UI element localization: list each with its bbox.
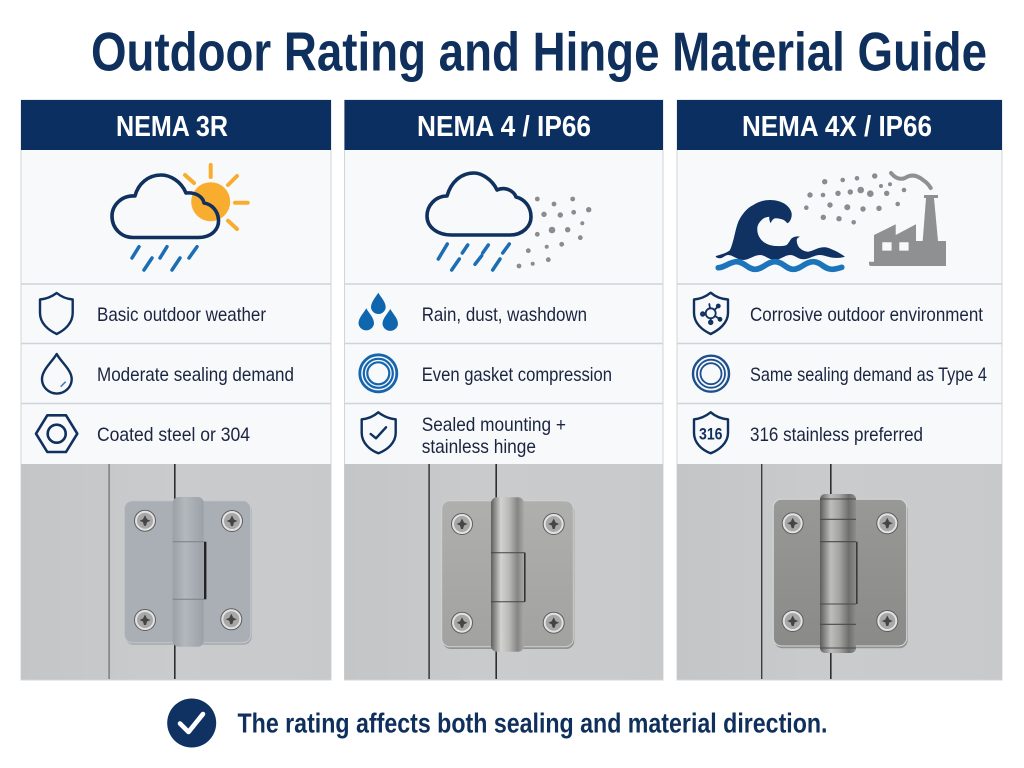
header: NEMA 3R: [21, 100, 331, 150]
icon: check badge: [167, 698, 216, 748]
row: sealed mounting + stainless hinge: [362, 412, 566, 458]
hinge photo: stainless: [344, 464, 663, 680]
row: sealed mounting + stainless hinge: stainless hinge: [422, 436, 536, 458]
icon: concentric gasket rings: [693, 356, 729, 392]
icon: three water drops: [358, 293, 398, 331]
row: even gasket compression: [360, 355, 612, 392]
header: NEMA 3R: NEMA 3R: [116, 111, 228, 143]
row: 316 stainless preferred: 316 stainless preferred: [750, 424, 923, 446]
footer takeaway: The rating affects both sealing and material direction.: [238, 708, 828, 738]
row: 316 stainless preferred: [694, 412, 923, 453]
row: sealed mounting + stainless hinge: Sealed mounting +: [422, 414, 566, 436]
hinge photo: coated steel: [21, 464, 331, 680]
header: NEMA 4X / IP66: [677, 100, 1002, 150]
row: same sealing demand as Type 4: [693, 356, 987, 392]
row: rain, dust, washdown: [358, 293, 587, 331]
row: moderate sealing demand: [42, 354, 294, 394]
row: coated steel or 304: [36, 415, 250, 452]
icon: cloud, sun and rain: [112, 165, 248, 270]
row: coated steel or 304: Coated steel or 304: [97, 424, 250, 446]
row: basic outdoor weather: Basic outdoor weather: [97, 304, 266, 326]
icon: wave, salt spray and factory: [716, 173, 946, 269]
header: NEMA 4 / IP66: [344, 100, 663, 150]
icon: shield with molecule: [694, 293, 728, 334]
panel: NEMA 4 / IP66: [344, 100, 663, 680]
panel: NEMA 4X / IP66: [677, 100, 1002, 680]
row: even gasket compression: Even gasket compression: [422, 364, 612, 386]
icon: shield with 316: 316: [699, 424, 722, 444]
icon: shield: [40, 293, 73, 334]
row: moderate sealing demand: Moderate sealing demand: [97, 364, 294, 386]
icon: shield with check: [362, 412, 396, 453]
row: rain, dust, washdown: Rain, dust, washdown: [422, 304, 587, 326]
icon: shield with 316: [694, 412, 728, 453]
row: corrosive outdoor environment: Corrosive outdoor environment: [750, 304, 984, 326]
row: corrosive outdoor environment: [694, 293, 984, 334]
header: NEMA 4X / IP66: NEMA 4X / IP66: [742, 111, 932, 143]
icon: water drop: [42, 354, 72, 394]
hinge photo: 316 stainless: [677, 464, 1002, 680]
header: NEMA 4 / IP66: NEMA 4 / IP66: [417, 111, 591, 143]
row: basic outdoor weather: [40, 293, 266, 334]
icon: cloud, rain and dust: [427, 173, 591, 270]
footer takeaway: [167, 698, 827, 748]
icon: concentric gasket rings: [360, 355, 397, 392]
icon: hex nut: [36, 415, 77, 452]
panel: NEMA 3R: [21, 100, 331, 680]
